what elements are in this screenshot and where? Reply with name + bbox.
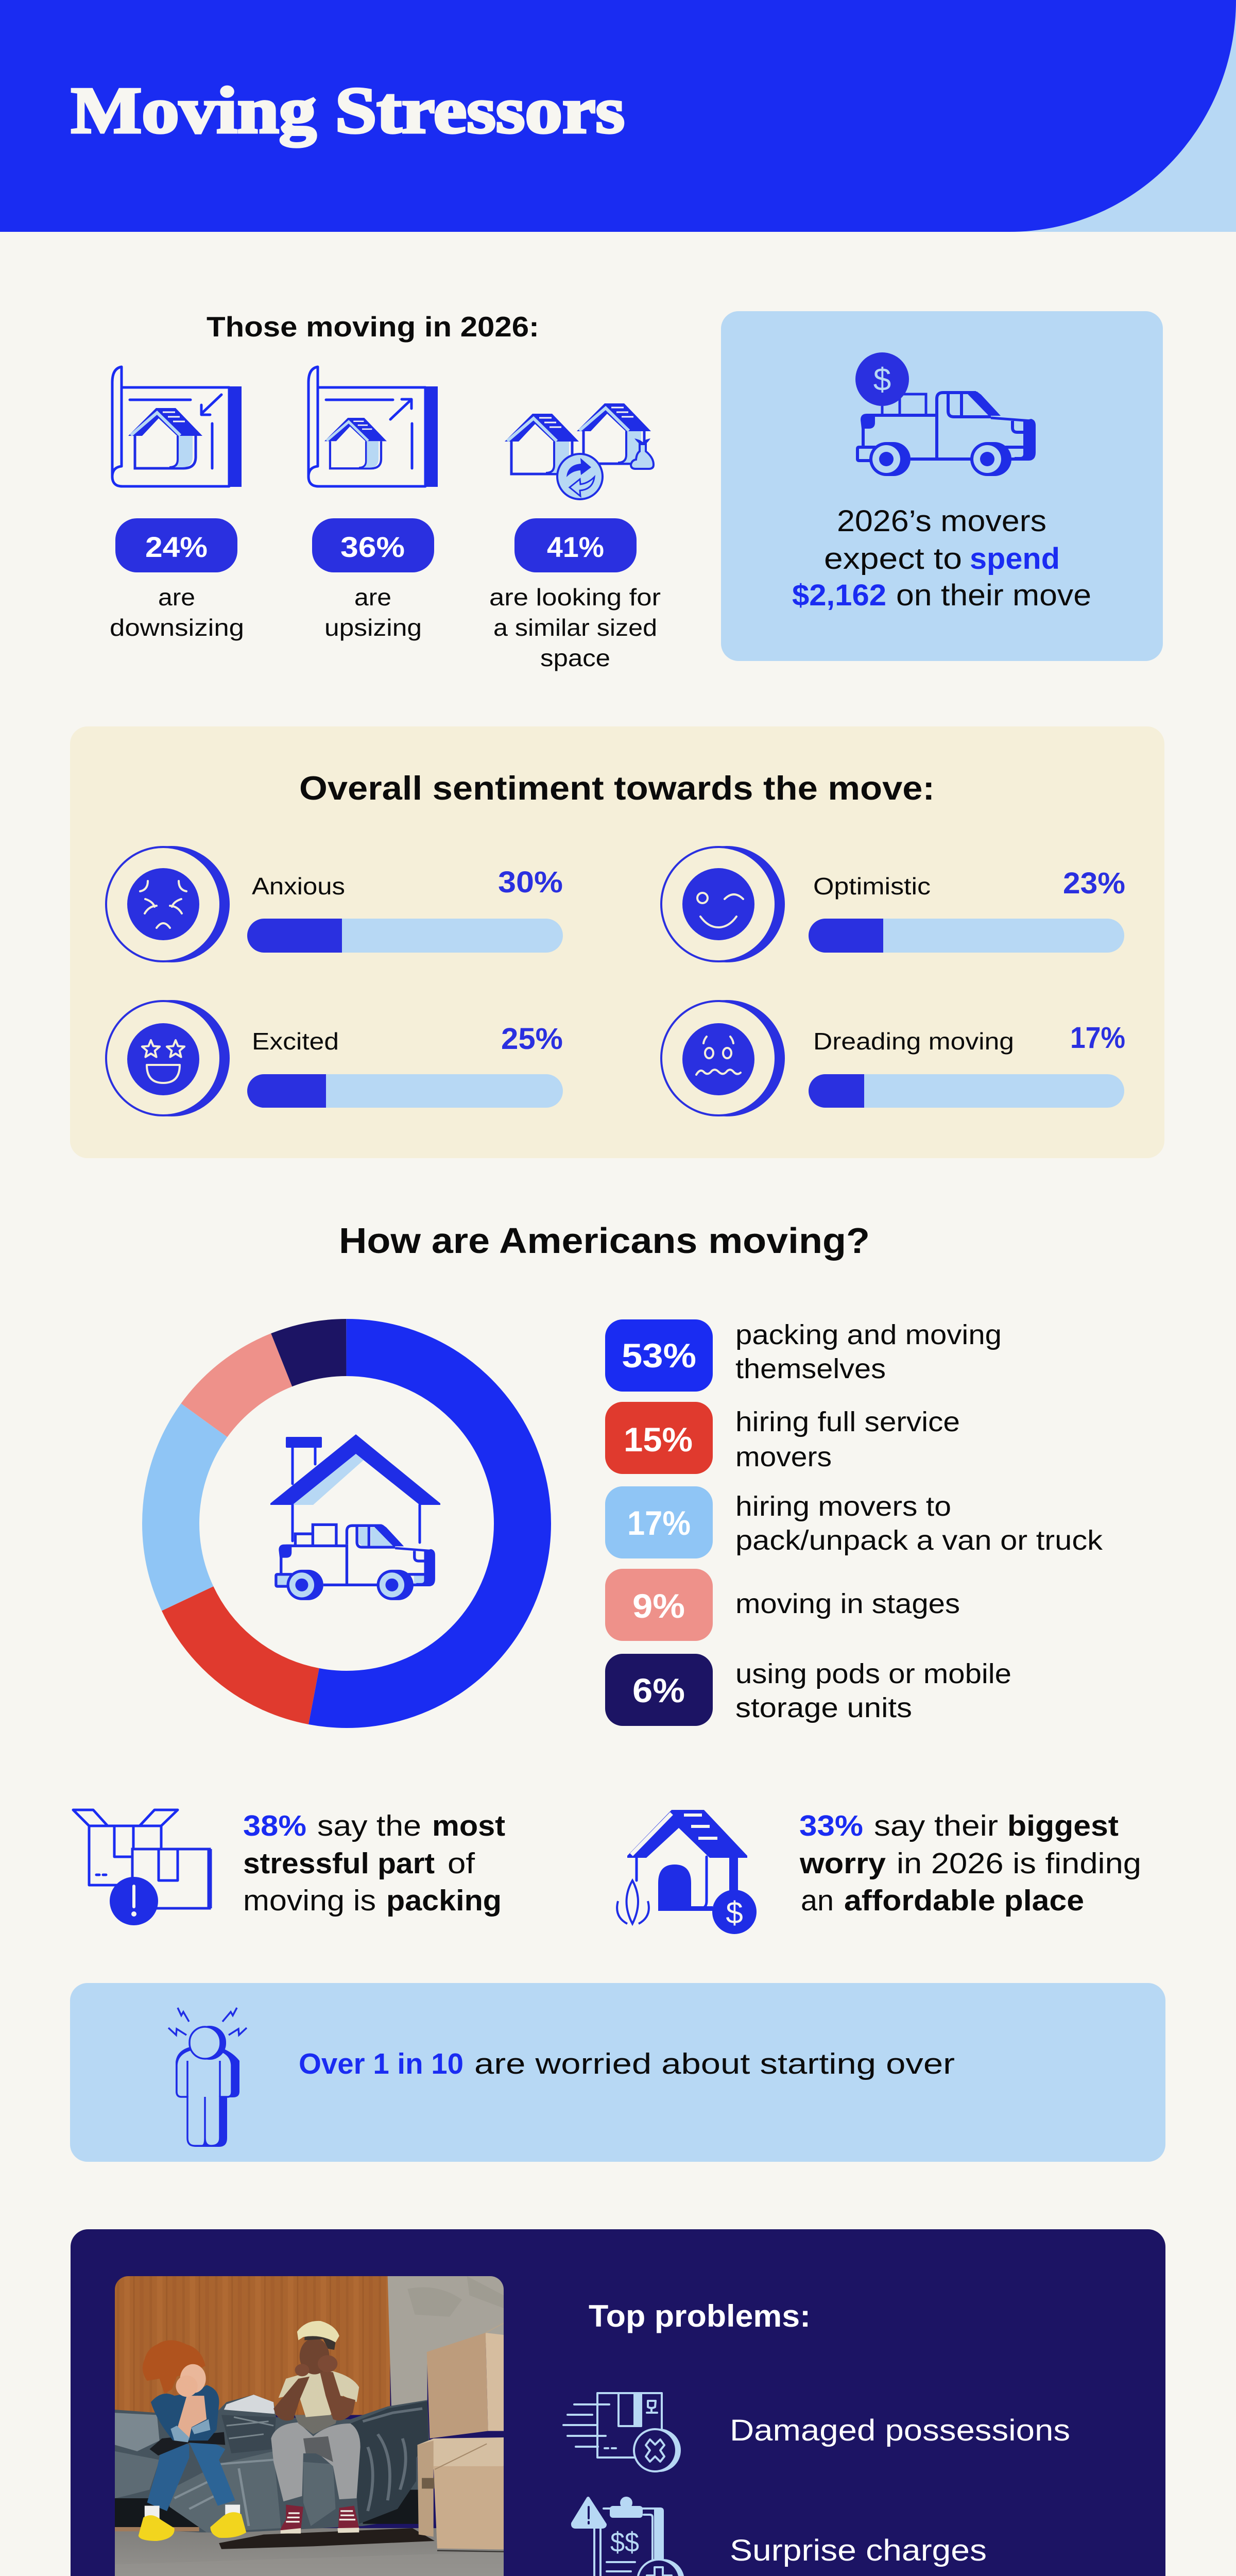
sentiment: excited: Excited (252, 1028, 339, 1055)
heading: overall sentiment: Overall sentiment towards the move: (299, 769, 935, 807)
text: spend statement (792, 504, 1091, 612)
legend item: 6%: storage units (735, 1692, 912, 1723)
text: worried about starting over: Over 1 in 10 (299, 2047, 464, 2080)
heading: those moving in 2026: Those moving in 2026: (207, 311, 539, 343)
legend item: 53%: 53% (622, 1336, 696, 1375)
sentiment: optimistic: 23% (1063, 867, 1125, 900)
problem: damaged possessions (563, 2393, 1070, 2472)
icon: house with dollar (617, 1810, 757, 1934)
icon: downsizing blueprint (112, 367, 242, 487)
icon: truck with dollar coin: $ (873, 362, 891, 398)
problem: surprise charges (573, 2497, 987, 2576)
panel: bad experience with movers (71, 2229, 1165, 2576)
text: 33% affordable place: affordable place (844, 1884, 1084, 1917)
panel: overall sentiment (70, 726, 1164, 1158)
legend item: 53%: packing and moving (735, 1319, 1002, 1350)
text: 38% packing: of (448, 1847, 475, 1880)
text: 33% affordable place: 33% (799, 1809, 863, 1842)
text: 38% packing: moving is (243, 1884, 376, 1917)
icon: clipboard with charges (573, 2497, 684, 2576)
stat pill: 24% (115, 518, 237, 572)
sentiment: dreading moving (661, 1000, 1125, 1116)
donut chart (171, 1348, 522, 1699)
icon: upsizing blueprint (308, 367, 438, 487)
icon: plant vase (631, 438, 654, 469)
legend item: 15%: movers (735, 1442, 832, 1472)
sentiment: excited (106, 1000, 563, 1116)
icon: worried face (661, 1000, 785, 1116)
label: upsizing: upsizing (324, 614, 422, 641)
panel: expected spend (721, 311, 1163, 661)
legend item: 6%: 6% (632, 1671, 685, 1709)
legend item: 53% (605, 1319, 1002, 1392)
photo: couple on wrapped sofa (115, 2276, 504, 2576)
stat pill: 41%: 41% (547, 531, 604, 563)
text: 33% affordable place: an (801, 1884, 834, 1917)
label: downsizing (110, 584, 244, 641)
label: similar sized: are looking for (489, 584, 661, 611)
text: worried about starting over (299, 2047, 955, 2080)
stat pill: 36%: 36% (340, 531, 405, 563)
bar: anxious 30% (247, 919, 563, 953)
legend item: 6%: using pods or mobile (735, 1658, 1011, 1689)
sentiment: dreading moving: 17% (1070, 1021, 1125, 1055)
legend item: 6% (605, 1654, 1011, 1726)
sentiment: anxious: 30% (498, 866, 563, 899)
sentiment: optimistic (661, 846, 1125, 962)
icon: house with dollar: $ (726, 1895, 743, 1930)
text: spend statement: on their move (896, 579, 1091, 612)
bar: excited 25% (247, 1074, 563, 1108)
text: 38% packing: stressful part (243, 1847, 435, 1880)
legend item: 9% (605, 1569, 960, 1641)
icon: boxes with warning (73, 1810, 210, 1925)
sentiment: dreading moving: Dreading moving (813, 1028, 1014, 1055)
text: 38% packing (243, 1809, 505, 1917)
legend item: 15%: hiring full service (735, 1406, 960, 1437)
label: downsizing: are (158, 584, 195, 611)
icon: clipboard with charges: $$ (610, 2527, 639, 2558)
label: downsizing: downsizing (110, 614, 244, 641)
text: 33% affordable place: in 2026 is finding (897, 1847, 1141, 1880)
legend item: 9%: moving in stages (735, 1588, 960, 1619)
heading: how are Americans moving: How are Americans moving? (339, 1221, 870, 1261)
legend item: 53%: themselves (735, 1353, 886, 1384)
sentiment: optimistic: Optimistic (813, 873, 931, 900)
legend item: 17%: pack/unpack a van or truck (735, 1525, 1103, 1556)
icon: stressed person (168, 2008, 247, 2147)
legend item: 17% (605, 1486, 1103, 1558)
title: Moving Stressors (71, 74, 625, 147)
text: worried about starting over: are worried about starting over (474, 2047, 955, 2080)
icon: similar sized houses (505, 403, 654, 499)
icon: anxious face (106, 846, 230, 962)
stat pill: 36% (312, 518, 434, 572)
panel: over 1 in 10 (70, 1983, 1165, 2162)
icon: star-eyed face (106, 1000, 230, 1116)
text: 38% packing: packing (386, 1884, 502, 1917)
bar: dreading 17% (809, 1074, 1124, 1108)
label: upsizing (324, 584, 422, 641)
heading: top problems: Top problems: (589, 2299, 811, 2333)
problem: surprise charges: Surprise charges (730, 2534, 987, 2567)
problem: damaged possessions: Damaged possessions (730, 2414, 1070, 2447)
legend (605, 1319, 1103, 1726)
text: spend statement: spend (970, 542, 1060, 575)
label: similar sized (489, 584, 661, 671)
text: 38% packing: 38% (243, 1809, 306, 1842)
icon: house and truck (270, 1434, 440, 1600)
stat pill: 41% (514, 518, 637, 572)
text: 33% affordable place (799, 1809, 1141, 1917)
stat pill: 24%: 24% (145, 531, 208, 563)
icon: winking face (661, 846, 785, 962)
label: similar sized: a similar sized (493, 614, 657, 641)
legend item: 17%: 17% (627, 1504, 691, 1542)
icon: truck with dollar coin (855, 352, 1036, 476)
header banner (0, 0, 1236, 232)
legend item: 15%: 15% (624, 1420, 693, 1459)
label: similar sized: space (540, 645, 610, 671)
legend item: 15% (605, 1402, 960, 1474)
legend item: 17%: hiring movers to (735, 1491, 951, 1522)
sentiment: anxious (106, 846, 563, 962)
text: 33% affordable place: biggest (1007, 1809, 1119, 1842)
text: spend statement: expect to (824, 542, 962, 575)
sentiment: anxious: Anxious (252, 873, 345, 900)
bar: optimistic 23% (809, 919, 1124, 953)
text: 33% affordable place: worry (799, 1847, 886, 1880)
text: 38% packing: most (432, 1809, 505, 1842)
legend item: 9%: 9% (632, 1587, 685, 1625)
icon: damaged box (563, 2393, 681, 2472)
sentiment: excited: 25% (501, 1022, 563, 1056)
text: spend statement: $2,162 (792, 579, 886, 612)
label: upsizing: are (354, 584, 391, 611)
text: 38% packing: say the (317, 1809, 421, 1842)
text: 33% affordable place: say their (874, 1809, 998, 1842)
text: spend statement: 2026’s movers (837, 504, 1046, 538)
